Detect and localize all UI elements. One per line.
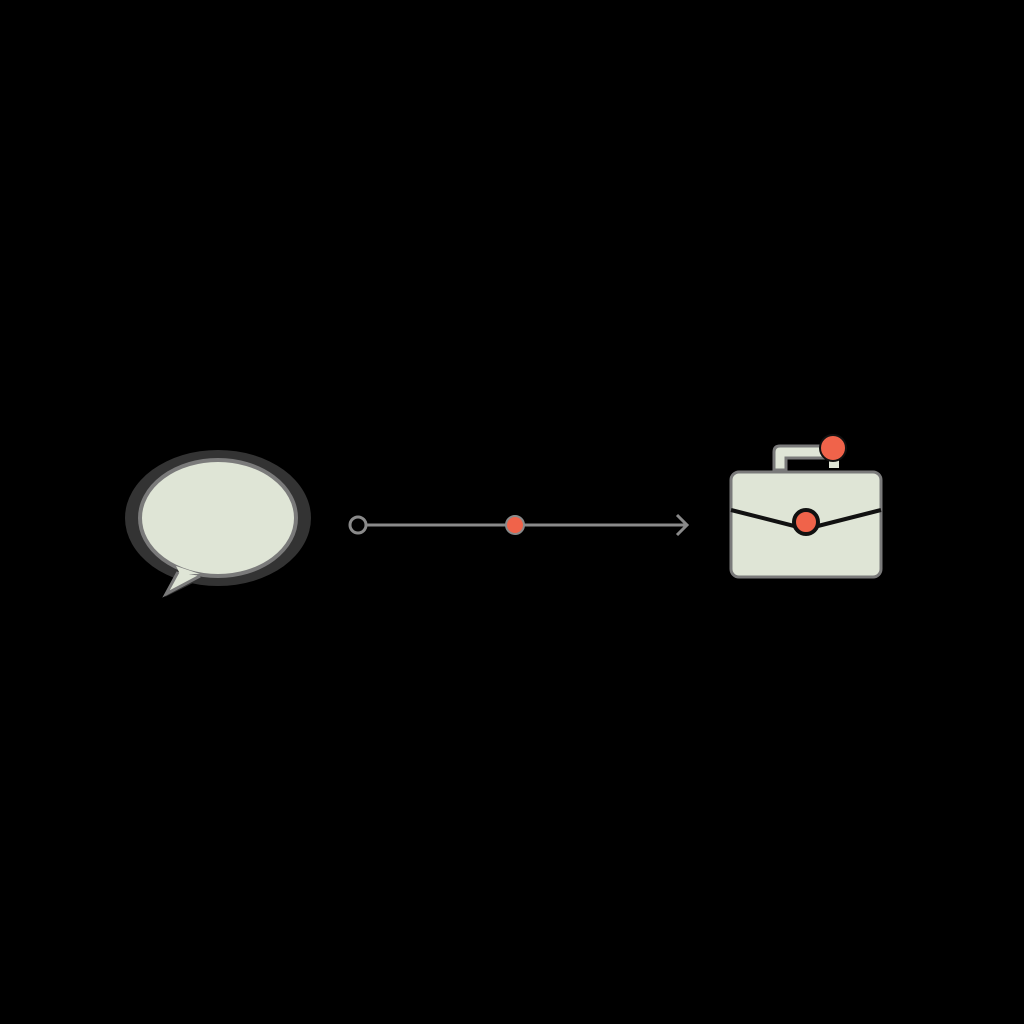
icon: speech bubble [125,450,311,597]
arrow: connector [350,515,687,535]
icon: briefcase [731,435,881,577]
